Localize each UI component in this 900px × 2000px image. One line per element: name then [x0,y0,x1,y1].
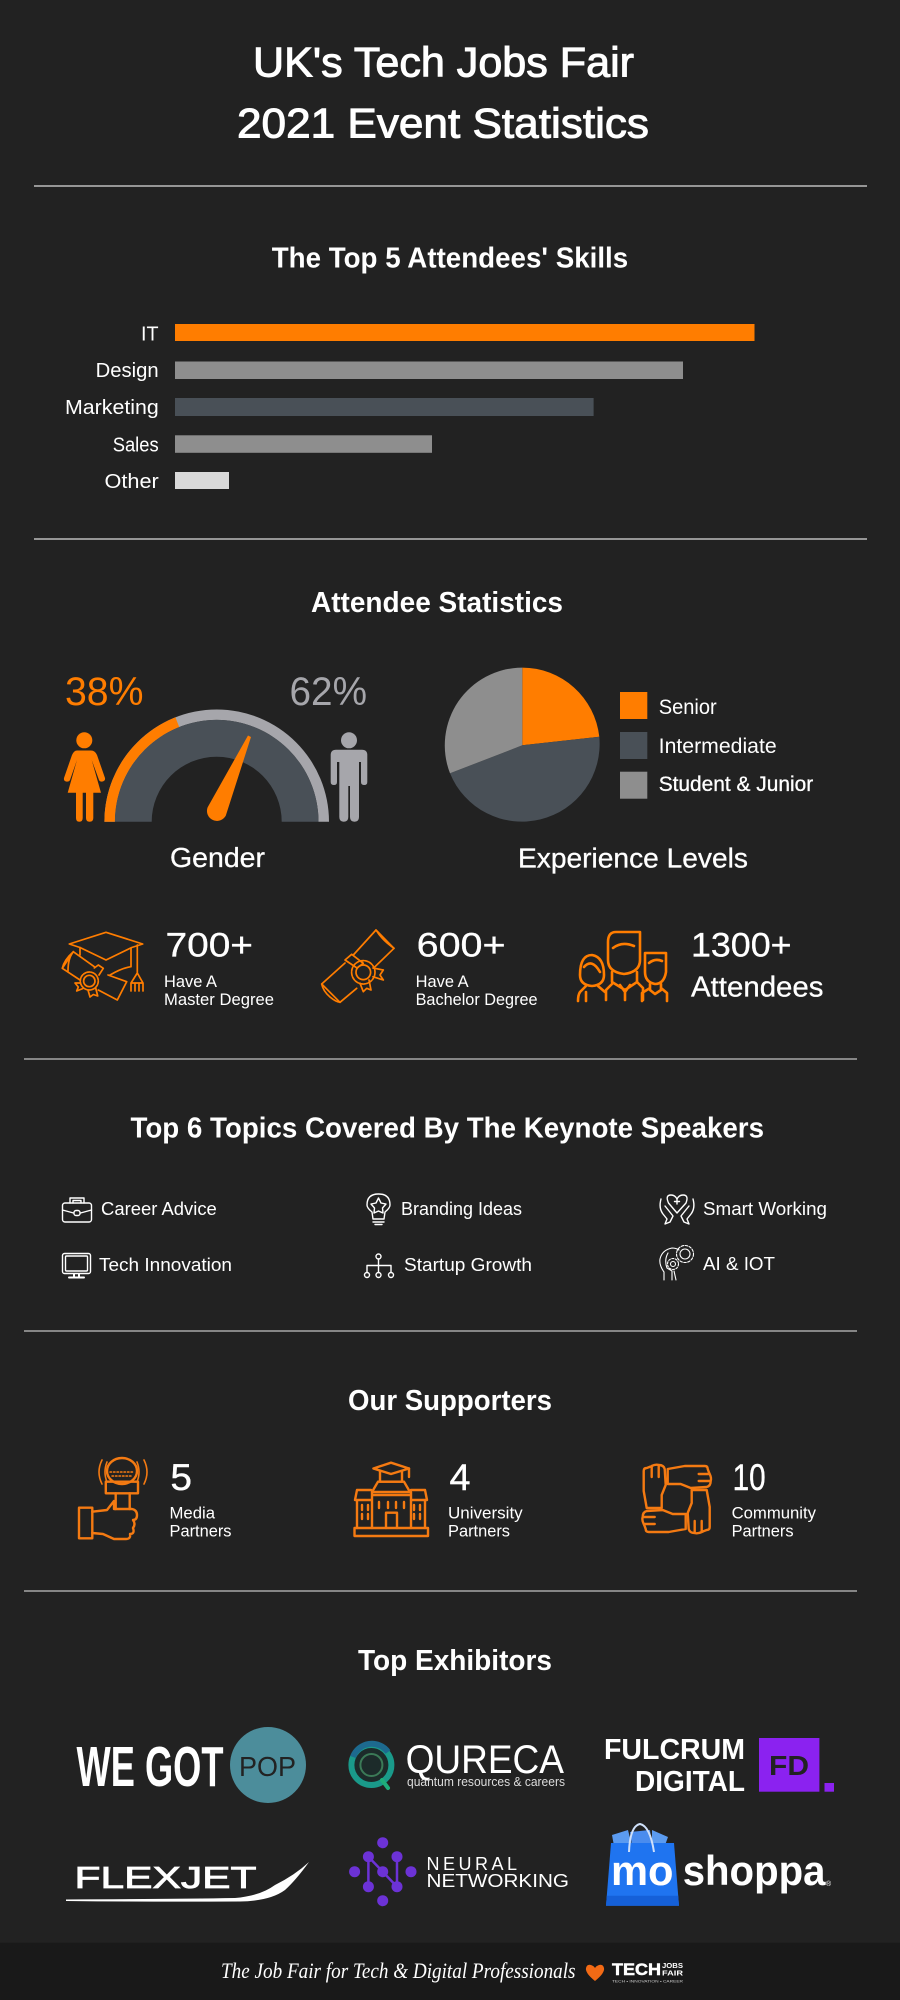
logo: qureca: QURECA [406,1738,564,1782]
icon: light bulb with star [367,1194,390,1224]
stat: university partners: University [448,1505,523,1523]
logo: neural networking [349,1837,569,1906]
bar chart: skills: Sales [113,435,159,457]
gauge arc [104,709,329,822]
logo: fulcrum digital [604,1734,834,1798]
panel: our supporters [79,1385,817,1541]
heading: top exhibitors: Top Exhibitors [358,1645,552,1677]
stat: attendees [578,927,824,1004]
icon: man [331,732,367,822]
heading: attendee statistics: Attendee Statistics [311,587,563,619]
logo: fulcrum digital: DIGITAL [635,1766,745,1798]
logo: flexjet: FLEXJET [74,1860,257,1895]
stat: university partners: 4 [450,1457,470,1498]
title [237,39,649,146]
topic: startup growth: Startup Growth [404,1254,532,1275]
heading: keynote topics: Top 6 Topics Covered By The Keynote Speakers [130,1113,764,1145]
logo: tech jobs fair: JOBS [662,1961,683,1970]
footer band [0,1943,900,2000]
stat: master degree: 700+ [166,927,253,965]
stat: attendees: 1300+ [691,927,792,965]
stat: media partners: 5 [170,1457,192,1498]
stat: bachelor degree: Bachelor Degree [416,991,538,1009]
logo: tech jobs fair: TECH [612,1960,661,1979]
topic: branding ideas [367,1194,522,1224]
legend: Senior [659,696,717,719]
title: 2021 Event Statistics [237,99,649,146]
footer tagline: The Job Fair for Tech & Digital Professionals [221,1958,576,1983]
stat: attendees: Attendees [691,972,824,1004]
logo: fulcrum digital: FD [769,1750,809,1781]
stat: university partners [354,1457,523,1541]
topic: tech innovation [62,1254,232,1278]
stat: media partners [79,1457,232,1541]
pie chart: experience levels [445,668,813,874]
title: UK's Tech Jobs Fair [253,39,634,86]
topic: branding ideas: Branding Ideas [401,1198,522,1219]
topic: career advice: Career Advice [101,1198,217,1219]
logo: we got pop: WE GOT [76,1735,224,1799]
topic: AI and IOT [660,1246,775,1280]
logo: neural networking: NEURAL [426,1854,517,1874]
experience levels label: Experience Levels [518,842,748,874]
female percentage: 38% [65,670,144,714]
topic: AI and IOT: AI & IOT [703,1253,775,1274]
logo: qureca [351,1738,565,1789]
legend: Intermediate [659,735,777,758]
stat: master degree: Master Degree [164,991,274,1009]
panel: top exhibitors [66,1645,834,1906]
stat: media partners: Media [170,1505,216,1523]
topic: smart working [660,1195,827,1224]
stat: community partners: 10 [733,1457,766,1498]
stat: university partners: Partners [448,1523,510,1541]
bar chart: skills: Marketing [65,397,159,419]
logo: moshoppa: shoppa [683,1847,826,1894]
logo: moshoppa: mo [611,1847,674,1894]
heading: our supporters: Our Supporters [348,1385,552,1417]
panel: attendee statistics [62,587,824,1009]
icon: hands holding heart [660,1195,694,1224]
gauge chart: gender [64,670,367,873]
stat: master degree [62,927,274,1009]
logo: moshoppa [606,1824,832,1906]
panel: top 5 attendee skills [65,242,754,493]
legend: Student & Junior [659,773,813,796]
bar chart: skills: IT [141,324,158,346]
stat: bachelor degree: 600+ [417,927,506,965]
topic: startup growth [364,1254,532,1278]
logo: moshoppa: ® [826,1880,832,1888]
legend [620,692,813,799]
gauge needle [207,736,251,821]
bar chart: skills: Design [96,360,159,382]
male percentage: 62% [290,670,367,714]
icon: computer monitor [62,1254,90,1278]
icon: university building [354,1463,428,1536]
icon: robot head with gears [660,1246,694,1280]
heading: skills: The Top 5 Attendees' Skills [272,242,628,274]
logo: tech jobs fair: TECH • INNOVATION • CAREER [612,1978,683,1984]
logo: flexjet [66,1860,309,1902]
logo: fulcrum digital: FULCRUM [604,1734,745,1766]
stat: community partners: Partners [732,1523,794,1541]
topic: smart working: Smart Working [703,1198,827,1219]
logo: qureca: quantum resources & careers [407,1774,565,1789]
icon: four interlocking hands [642,1465,711,1533]
stat: bachelor degree: Have A [416,973,469,991]
icon: group of people [578,932,667,1001]
stat: community partners: Community [732,1505,817,1523]
icon: graduation cap and diploma [62,932,143,1000]
logo: neural networking: NETWORKING [426,1871,569,1891]
icon: briefcase [62,1198,92,1222]
topic: tech innovation: Tech Innovation [99,1254,232,1275]
gender label: Gender [170,842,265,873]
icon: woman [64,732,105,822]
stat: community partners [642,1457,817,1541]
logo: tech jobs fair: FAIR [662,1968,684,1978]
icon: diploma scroll [322,930,394,1002]
stat: media partners: Partners [170,1523,232,1541]
stat: master degree: Have A [164,973,217,991]
icon: heart [586,1965,604,1981]
topic: career advice [62,1198,217,1222]
icon: network hierarchy [364,1254,394,1278]
panel: keynote topics [62,1113,827,1280]
bar chart: skills [65,324,754,493]
icon: hand holding microphone [79,1458,147,1539]
logo: tech jobs fair [612,1960,684,1984]
bar chart: skills: Other [104,471,159,493]
stat: bachelor degree [322,927,538,1009]
logo: we got pop: POP [239,1751,296,1782]
